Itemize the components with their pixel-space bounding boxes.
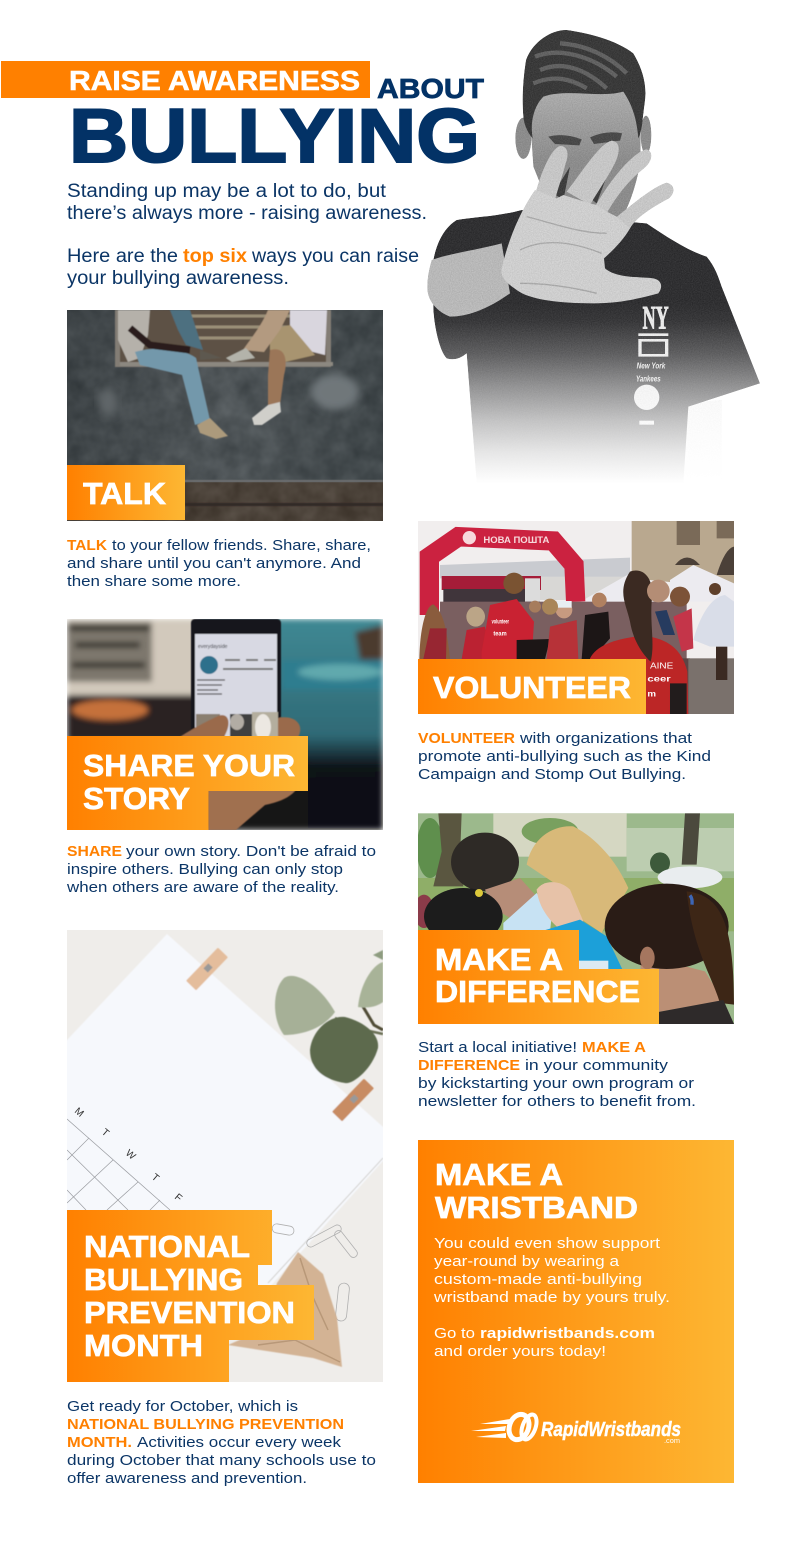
shirt logos: NY	[643, 300, 669, 336]
photo: hand holding phone showing a profile: everydayside	[198, 644, 228, 650]
foil wrapped runner	[693, 595, 734, 647]
volunteer description: VOLUNTEER	[418, 730, 515, 747]
paper clips	[271, 1223, 359, 1322]
share description	[66, 843, 376, 896]
heading word: bullying: BULLYING	[69, 94, 480, 179]
label: talk: TALK	[83, 476, 167, 511]
logo: RapidWristbands: RapidWristbands	[541, 1419, 681, 1441]
title banner: raise awareness about bullying	[1, 61, 484, 179]
make a difference description: newsletter for others to benefit from.	[418, 1093, 696, 1110]
ears	[515, 118, 531, 159]
talk description: to your fellow friends. Share, share,	[112, 537, 371, 554]
gaps between fingers	[553, 167, 607, 203]
phone	[190, 619, 282, 730]
weekday letters: W	[123, 1148, 138, 1163]
label: make a difference: DIFFERENCE	[435, 974, 640, 1009]
label: share your story	[67, 736, 308, 830]
weekday letters: T	[149, 1172, 161, 1184]
wristband heading: MAKE A	[435, 1157, 563, 1192]
intro text block	[67, 181, 427, 289]
label: national bullying prevention month: NATIONAL	[84, 1229, 250, 1264]
shirt logos: New York	[637, 360, 666, 370]
national month description: Activities occur every week	[137, 1434, 342, 1451]
photo: volunteers at a race finish arch: НОВА ПОШТА	[483, 535, 550, 545]
label: national bullying prevention month	[67, 1210, 314, 1382]
share description: inspire others. Bullying can only stop	[67, 861, 343, 878]
crowd	[440, 602, 687, 659]
eucalyptus leaves	[335, 1018, 383, 1034]
eyes and brows	[548, 132, 622, 145]
panel: volunteer	[418, 521, 734, 783]
shirt logos	[634, 300, 669, 425]
photo: teen holding up his hand	[427, 30, 760, 483]
label: make a difference	[418, 930, 659, 1024]
panel: national bullying prevention month	[50, 930, 400, 1487]
photo: calendar page with leaves and paper clips	[67, 930, 383, 1382]
crumpled kraft paper	[228, 1252, 342, 1367]
right girl	[640, 965, 720, 1012]
forearm	[427, 243, 510, 317]
wristband body text: year-round by wearing a	[434, 1253, 620, 1270]
label: national bullying prevention month: BULLYING	[84, 1262, 243, 1297]
profile avatar	[200, 656, 218, 674]
red arch	[429, 537, 576, 615]
label: volunteer: VOLUNTEER	[433, 670, 631, 705]
orange banner strip	[1, 61, 370, 98]
wristband body text	[433, 1235, 670, 1360]
white tents	[585, 565, 734, 600]
wristband body text: Go to	[434, 1325, 475, 1342]
hand	[180, 714, 229, 736]
make a difference description: Start a local initiative!	[418, 1039, 577, 1056]
label: talk	[67, 465, 185, 520]
panel: talk	[67, 310, 383, 590]
label: share your story: SHARE YOUR	[83, 748, 295, 783]
talk description: then share some more.	[67, 573, 241, 590]
orange gradient background	[418, 1140, 734, 1483]
photo: volunteers at a race finish arch: volunteer	[492, 618, 509, 625]
wristband heading: WRISTBAND	[435, 1190, 638, 1225]
face	[531, 92, 640, 217]
hair	[523, 30, 645, 138]
make a difference description: MAKE A	[582, 1039, 646, 1056]
make a difference description	[418, 1039, 696, 1110]
weekday letters: M	[72, 1106, 86, 1120]
national month description: during October that many schools use to	[67, 1452, 376, 1469]
intro text block: Standing up may be a lot to do, but	[67, 181, 387, 202]
calendar paper	[50, 934, 400, 1470]
man beside	[647, 580, 670, 602]
make a difference description: in your community	[525, 1057, 669, 1074]
calendar grid	[67, 1119, 170, 1210]
national month description: Get ready for October, which is	[67, 1398, 298, 1415]
share description: when others are aware of the reality.	[66, 879, 339, 896]
weekday letters: T	[99, 1127, 111, 1139]
photo: group of girls leaning together outdoors	[414, 813, 734, 1024]
label: share your story: STORY	[83, 781, 190, 816]
photo: two friends sitting on a ledge	[67, 310, 383, 521]
label: make a difference: MAKE A	[435, 942, 563, 977]
label: volunteer	[418, 659, 646, 714]
wristband body text: custom-made anti-bullying	[434, 1271, 642, 1288]
wristband body text: and order yours today!	[434, 1343, 606, 1360]
palm	[501, 190, 661, 303]
weekday letters	[72, 1106, 184, 1204]
label: national bullying prevention month: PREVENTION	[84, 1295, 295, 1330]
wristband body text: rapidwristbands.com	[480, 1325, 655, 1342]
national month description: NATIONAL BULLYING PREVENTION	[67, 1416, 344, 1433]
make a difference description: by kickstarting your own program or	[418, 1075, 694, 1092]
intro text block: top six	[183, 246, 247, 267]
blonde woman	[527, 826, 628, 933]
talk description: and share until you can't anymore. And	[67, 555, 361, 572]
right friend	[290, 310, 327, 355]
weekday letters: F	[172, 1192, 184, 1204]
volunteer description: with organizations that	[519, 730, 693, 747]
left friend	[118, 310, 150, 362]
hair highlights	[533, 43, 627, 88]
girl with dark hair	[451, 833, 519, 891]
panel: make a wristband	[418, 1140, 734, 1483]
logo: RapidWristbands: .com	[664, 1438, 680, 1445]
volunteer description: promote anti-bullying such as the Kind	[418, 748, 711, 765]
lower left girl	[418, 894, 432, 928]
photo: hand holding phone showing a profile	[67, 619, 383, 830]
panel: make a difference	[414, 813, 734, 1110]
shirt logos: Yankees	[636, 374, 661, 384]
volunteer description: Campaign and Stomp Out Bullying.	[418, 766, 686, 783]
wristband body text: wristband made by yours truly.	[433, 1289, 670, 1306]
intro text block: ways you can raise	[251, 246, 419, 267]
intro text block: there’s always more - raising awareness.	[67, 203, 427, 224]
photo: volunteers at a race finish arch: AINE	[650, 660, 674, 670]
share description: SHARE	[67, 843, 122, 860]
panel: share your story	[66, 619, 383, 896]
national month description: MONTH.	[67, 1434, 132, 1451]
intro text block: your bullying awareness.	[67, 268, 289, 289]
national month description	[67, 1398, 376, 1487]
make a difference description: DIFFERENCE	[418, 1057, 520, 1074]
talk description: TALK	[67, 537, 107, 554]
woman in red shirt	[590, 636, 688, 714]
logo: RapidWristbands	[471, 1412, 681, 1445]
share description: your own story. Don't be afraid to	[126, 843, 376, 860]
national month description: offer awareness and prevention.	[67, 1470, 307, 1487]
talk description	[67, 537, 371, 590]
palm lines	[520, 217, 607, 293]
label: national bullying prevention month: MONTH	[84, 1328, 203, 1363]
t-shirt	[433, 210, 760, 483]
clothespin right	[332, 1079, 374, 1121]
wristband heading	[435, 1157, 638, 1225]
volunteer description	[418, 730, 711, 783]
photo: volunteers at a race finish arch	[418, 521, 734, 714]
bare arm below sleeve	[686, 400, 722, 447]
clothespin top	[186, 948, 228, 990]
fingers	[536, 140, 674, 229]
photo: volunteers at a race finish arch: m	[647, 689, 656, 699]
intro text block: Here are the	[67, 246, 178, 267]
photo: volunteers at a race finish arch: ceer	[647, 674, 671, 684]
wristband body text: You could even show support	[434, 1235, 661, 1252]
building	[632, 521, 734, 588]
heading word: about: ABOUT	[377, 73, 484, 104]
photo: volunteers at a race finish arch: team	[493, 631, 507, 638]
heading line: raise awareness: RAISE AWARENESS	[69, 65, 360, 96]
